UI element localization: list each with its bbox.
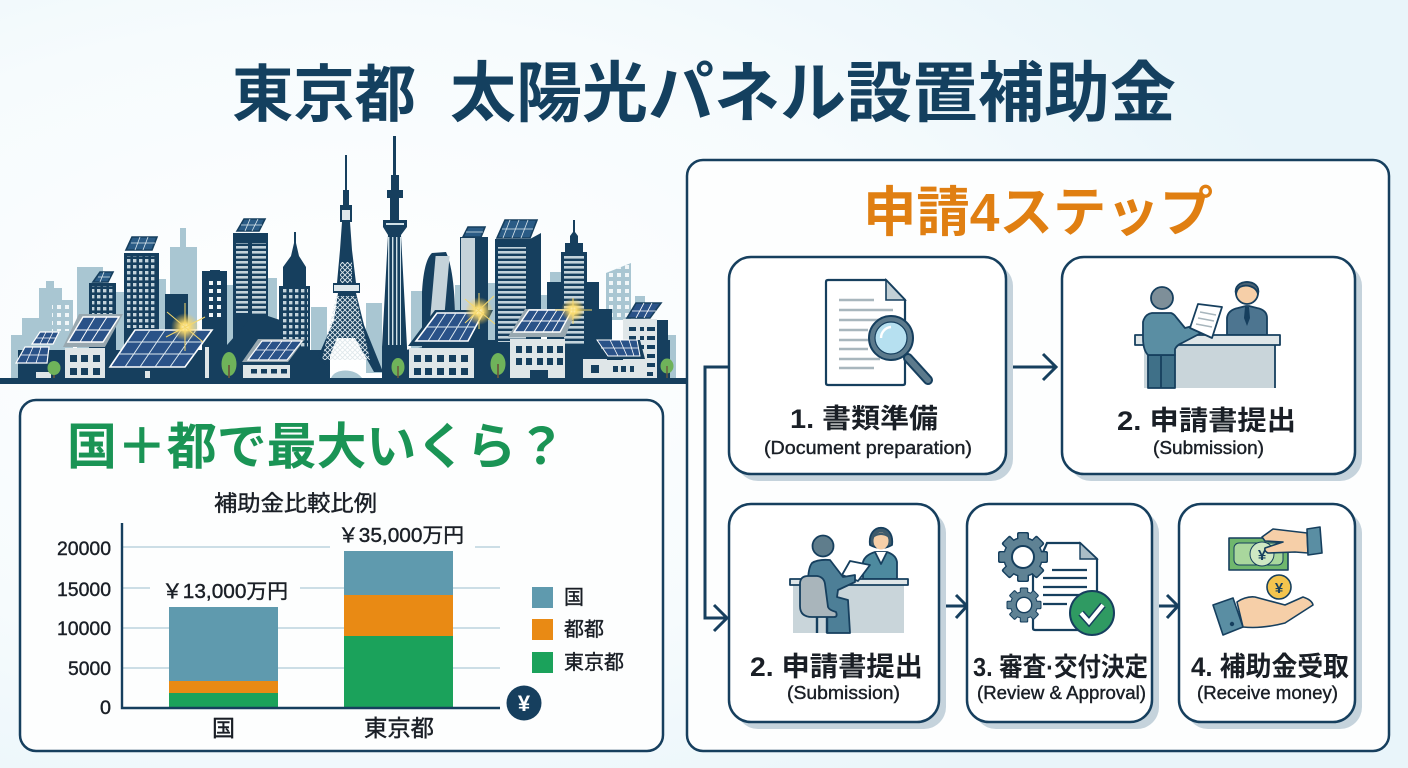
step label: 3. 審査·交付決定 xyxy=(973,652,1148,682)
y-axis labels: 0 xyxy=(100,698,111,719)
step label: 4. 補助金受取 xyxy=(1191,652,1349,682)
card: 3 review and approval xyxy=(967,504,1159,729)
icon: hands exchanging money xyxy=(1213,527,1322,635)
y-axis labels: 5000 xyxy=(68,659,111,680)
bar value labels: ￥13,000万円 xyxy=(162,581,288,603)
bar value labels: ￥35,000万円 xyxy=(338,525,464,547)
sun glints xyxy=(166,293,592,351)
icon: yen coin xyxy=(506,686,542,720)
rooftop solar arrays xyxy=(16,303,661,367)
chart title: 補助金比較比例 xyxy=(214,491,377,516)
arrow: lower card 2 to 3 xyxy=(939,595,967,618)
stacked bar chart xyxy=(57,523,500,741)
icon: yen coin: ¥ xyxy=(518,691,531,716)
step label: 2. 申請書提出 xyxy=(1117,406,1296,436)
step sublabel: (Document preparation) xyxy=(764,438,972,458)
legend: 国 xyxy=(564,587,584,609)
title: 東京都 xyxy=(232,61,416,130)
y-axis labels: 20000 xyxy=(57,539,111,560)
legend: 東京都 xyxy=(564,651,624,674)
icon: person handing in document at counter xyxy=(1135,282,1280,388)
card: 4 receive money xyxy=(1179,504,1362,729)
y-axis labels: 10000 xyxy=(57,619,111,640)
dark buildings xyxy=(18,220,670,378)
y-axis labels: 15000 xyxy=(57,580,111,601)
card: 2 submission (lower) xyxy=(729,504,946,729)
Tokyo Tower xyxy=(318,155,383,378)
panel: subsidy comparison xyxy=(20,400,663,751)
x-axis labels: 東京都 xyxy=(364,715,434,741)
background buildings xyxy=(11,228,676,378)
step sublabel: (Submission) xyxy=(1153,438,1264,458)
heading: four steps: 申請4ステップ xyxy=(863,183,1213,243)
foreground buildings xyxy=(36,319,657,378)
card: 1 document preparation xyxy=(729,257,1013,481)
icon: hands exchanging money: ¥ xyxy=(1275,580,1284,597)
step sublabel: (Review & Approval) xyxy=(977,683,1146,703)
x-axis labels: 国 xyxy=(212,715,235,741)
panel: application steps xyxy=(687,160,1389,751)
connector arrow: step 1 to lower row xyxy=(705,367,729,631)
step sublabel: (Submission) xyxy=(787,683,900,703)
bar value labels xyxy=(150,523,475,603)
trees xyxy=(48,352,674,378)
bar: national xyxy=(169,607,278,708)
icon: document with magnifier xyxy=(826,280,928,385)
heading: national plus Tokyo maximum: 国＋都で最大いくら？ xyxy=(67,419,566,475)
step sublabel: (Receive money) xyxy=(1197,683,1338,703)
step label: 2. 申請書提出 xyxy=(750,652,923,682)
icon: gears, document and check xyxy=(998,532,1114,635)
arrow: card 1 to card 2 xyxy=(1006,354,1056,380)
legend xyxy=(532,587,624,674)
illustration: Tokyo skyline with solar panels xyxy=(0,136,687,384)
legend: 都都 xyxy=(564,618,604,641)
ground line xyxy=(0,378,687,384)
Tokyo Skytree xyxy=(382,136,407,378)
icon: applicant seated at counter xyxy=(790,528,908,633)
icon: hands exchanging money: ¥ xyxy=(1258,547,1267,564)
step label: 1. 書類準備 xyxy=(790,404,938,434)
card: 2 submission (upper) xyxy=(1062,257,1362,481)
y-axis labels xyxy=(57,539,111,719)
arrow: card 3 to 4 xyxy=(1152,595,1178,618)
title: 太陽光パネル設置補助金 xyxy=(450,56,1176,130)
rooftop panels on towers xyxy=(93,219,537,282)
bar: Tokyo xyxy=(344,551,453,708)
x-axis labels xyxy=(212,715,434,741)
